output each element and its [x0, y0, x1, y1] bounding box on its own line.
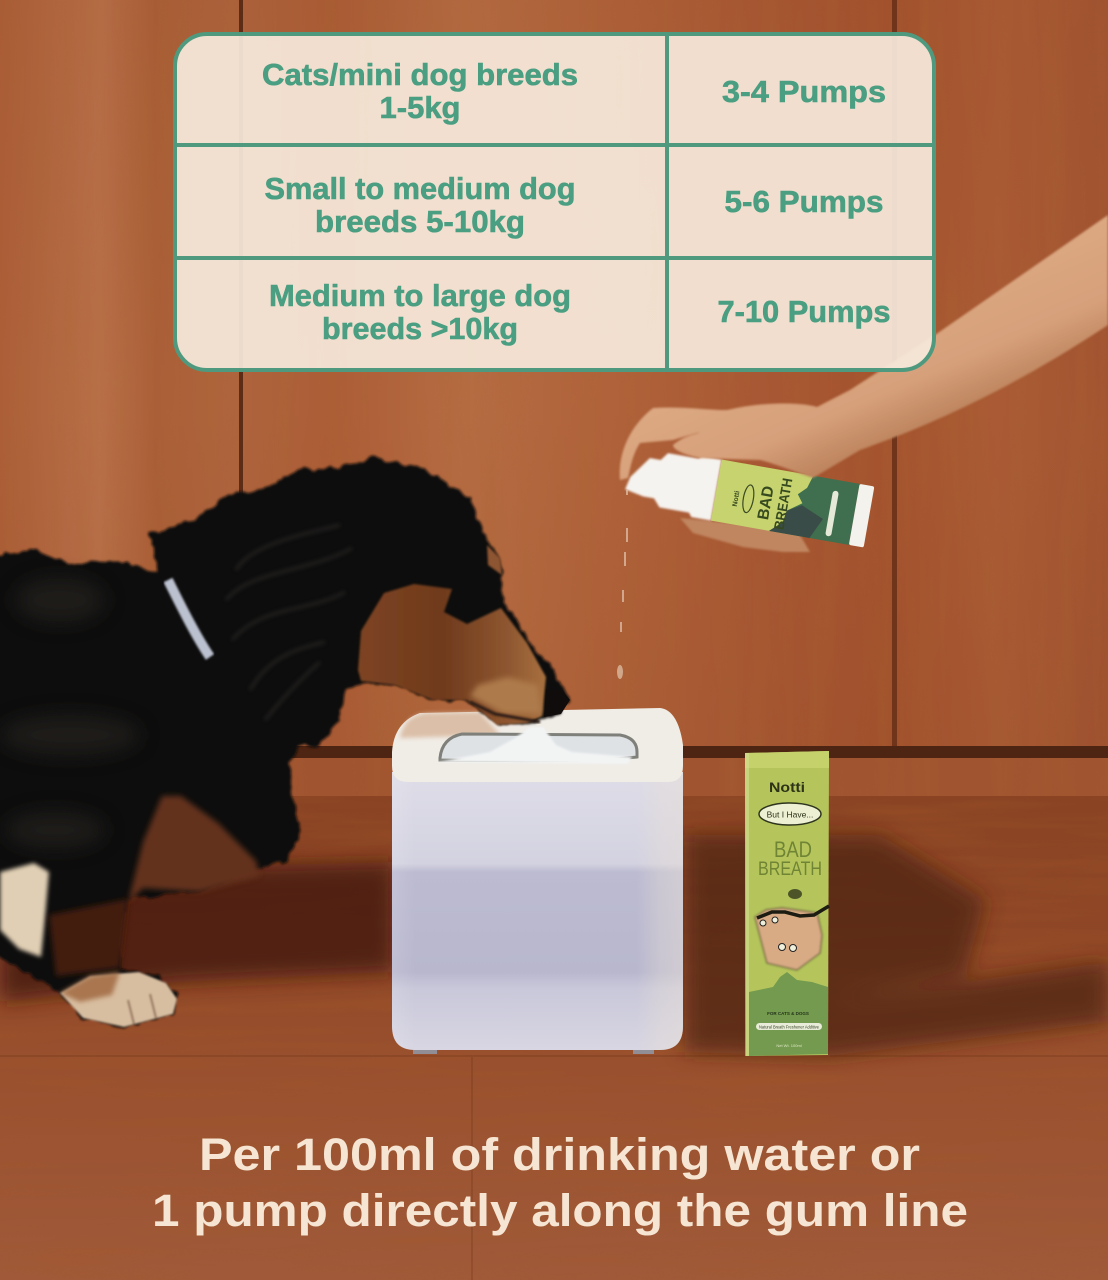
- bottle label text: Notti: [732, 490, 741, 507]
- box green base: [749, 972, 828, 1056]
- box front: [745, 751, 829, 1056]
- row 3 label: Medium to large dog: [269, 278, 571, 313]
- lower fingers: [680, 518, 810, 552]
- row 2 label: breeds 5-10kg: [315, 204, 525, 239]
- dog muzzle highlight: [470, 677, 542, 714]
- water drips: [617, 490, 628, 679]
- row 2 label: Small to medium dog: [264, 171, 576, 206]
- caption: [152, 1129, 968, 1236]
- dog chest tan: [128, 796, 260, 903]
- dog coat sheen: [0, 578, 140, 848]
- bottle label green base: [769, 470, 860, 545]
- row 3 label: breeds >10kg: [322, 311, 518, 346]
- fountain tank: [392, 772, 683, 1050]
- bottle label text: BREATH: [771, 477, 795, 531]
- product box: [745, 751, 829, 1056]
- box badge: But I Have...: [767, 810, 813, 820]
- box label pill: [756, 1023, 822, 1030]
- bottle label: [711, 460, 815, 537]
- wood floor: [0, 796, 1108, 1280]
- wood wall background: [0, 0, 1108, 800]
- dog collar: [168, 580, 210, 657]
- row 1 label: 1-5kg: [380, 90, 460, 125]
- dog face tan: [358, 584, 546, 725]
- fountain feet: [413, 1046, 654, 1054]
- bottle pump and collar: [622, 444, 722, 521]
- row 3 value: 7-10 Pumps: [718, 294, 890, 329]
- row 1 label: Cats/mini dog breeds: [262, 57, 578, 92]
- row 1 value: 3-4 Pumps: [722, 74, 886, 109]
- dog paw: [60, 972, 177, 1027]
- box bee icon: [788, 889, 802, 899]
- fountain water: [438, 727, 637, 764]
- box title: [758, 837, 822, 880]
- dog ear strands: [226, 525, 352, 720]
- floor shadows: [0, 835, 1108, 1056]
- row 2 label: [264, 171, 576, 239]
- product box: Natural Breath Freshener Additive: [759, 1024, 819, 1030]
- caption: Per 100ml of drinking water or: [199, 1129, 920, 1180]
- box small text: FOR CATS & DOGS: [767, 1011, 809, 1016]
- dog: [0, 457, 570, 1027]
- bottle: [622, 444, 874, 548]
- bottle pill label: [825, 490, 839, 537]
- dog white chest patch: [0, 863, 49, 957]
- box top flap: [745, 751, 829, 768]
- caption: 1 pump directly along the gum line: [152, 1185, 968, 1236]
- dosage table: [175, 34, 934, 370]
- water fountain: [392, 708, 683, 1054]
- row 2 value: 5-6 Pumps: [724, 184, 884, 219]
- box badge: [759, 803, 821, 825]
- table panel: [175, 34, 934, 370]
- fountain lid: [392, 708, 683, 782]
- box logo: Notti: [769, 779, 805, 795]
- row 3 label: [269, 278, 571, 346]
- table grid lines: [175, 34, 934, 370]
- arm and hand: [620, 215, 1108, 480]
- box title: BREATH: [758, 859, 822, 880]
- dog mouth line: [470, 702, 540, 722]
- box cat illustration: [755, 906, 829, 970]
- dog nose: [544, 689, 570, 717]
- row 1 label: [262, 57, 578, 125]
- bottle end cap: [849, 484, 874, 548]
- bottle badge: [741, 484, 756, 513]
- bottle label text: [729, 470, 795, 531]
- dog front leg: [49, 899, 128, 976]
- box title: BAD: [774, 837, 812, 862]
- dog eyebrow tan: [487, 545, 502, 575]
- product box: Net Wt. 100ml: [776, 1043, 802, 1048]
- bottle label text: BAD: [755, 485, 778, 521]
- dog body: [0, 457, 570, 1027]
